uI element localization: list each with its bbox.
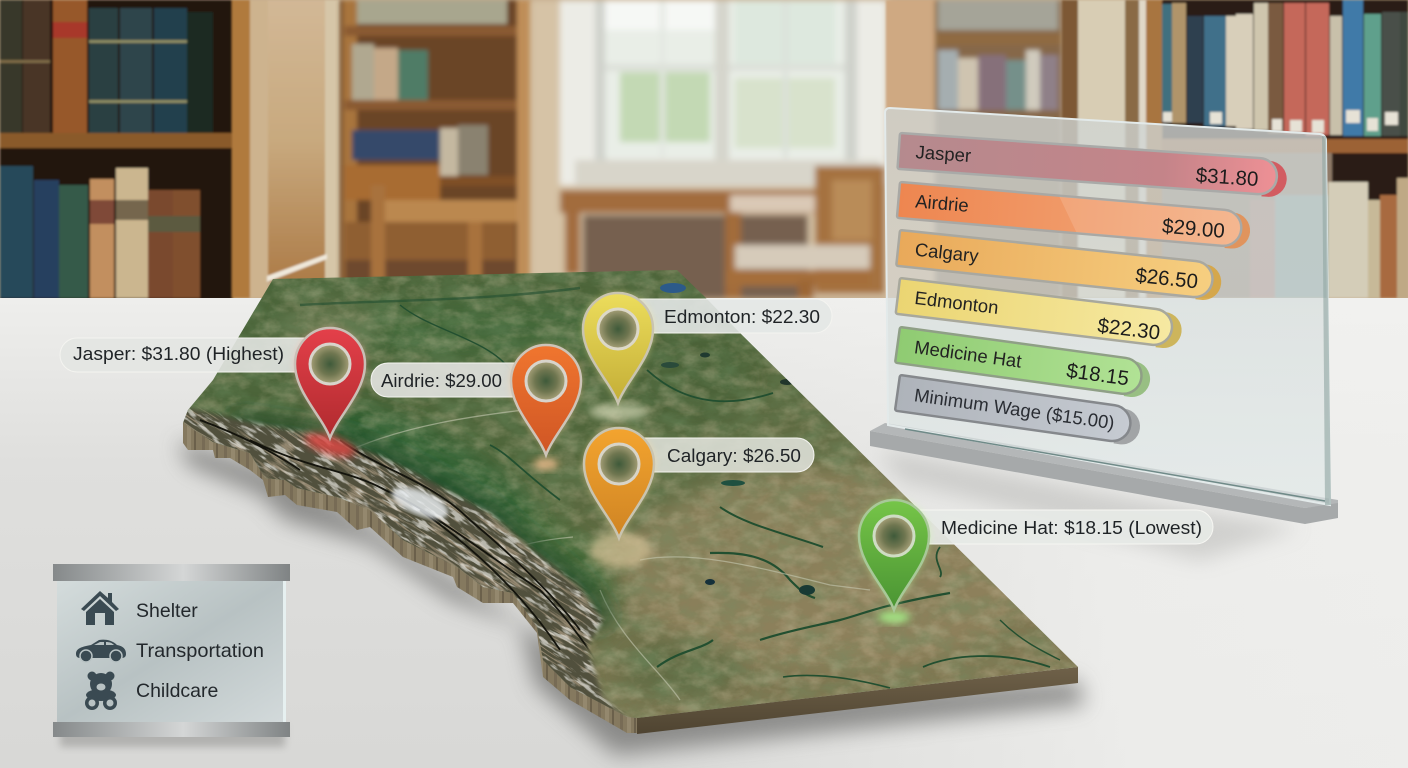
icon: house — [81, 591, 119, 625]
legend plaque — [53, 564, 290, 747]
legend text: Shelter: Shelter — [136, 600, 198, 622]
label: Medicine Hat: Medicine Hat: $18.15 (Lowest) — [941, 518, 1202, 538]
pin: Edmonton — [583, 293, 653, 403]
mountain band — [183, 406, 628, 717]
glass panel chart — [870, 108, 1338, 560]
pin: Medicine Hat — [859, 500, 929, 610]
right bookcases — [886, 0, 1408, 298]
window and desk — [531, 0, 891, 298]
map shadow on table — [178, 440, 1085, 755]
bar: Airdrie: Airdrie — [915, 190, 970, 216]
icon: car — [76, 640, 126, 662]
legend text: Childcare: Childcare — [136, 680, 218, 702]
label: Jasper: Jasper: $31.80 (Highest) — [73, 344, 284, 364]
map surface — [183, 270, 1078, 718]
pin: Jasper — [295, 328, 365, 438]
bar: Calgary: Calgary — [914, 239, 980, 266]
bar: Medicine Hat: $18.15 — [1065, 359, 1130, 390]
centre bookcase — [340, 0, 531, 298]
rivers and lakes — [300, 288, 1060, 688]
foothills shading — [230, 425, 605, 625]
bar: Edmonton: $22.30 — [1096, 314, 1161, 345]
bar: Jasper: $31.80 — [1195, 164, 1259, 191]
bar: Jasper — [897, 133, 1288, 198]
left bookcase — [0, 0, 340, 300]
label: Calgary — [635, 438, 814, 472]
bar: Airdrie: $29.00 — [1161, 215, 1226, 243]
bar: Calgary — [896, 230, 1223, 302]
bar: Minimum Wage: Minimum Wage ($15.00) — [913, 384, 1116, 433]
bar: Edmonton: Edmonton — [914, 287, 1000, 318]
table surface — [0, 298, 1408, 768]
pin: Calgary — [584, 428, 654, 538]
legend text: Transportation: Transportation — [136, 640, 264, 662]
label: Edmonton — [635, 299, 832, 333]
label: Edmonton: Edmonton: $22.30 — [664, 307, 820, 327]
bar: Edmonton — [895, 278, 1184, 350]
icon: teddy bear — [85, 672, 117, 710]
bar: Jasper: Jasper — [915, 141, 972, 166]
bar: Calgary: $26.50 — [1134, 264, 1199, 293]
background: library bookshelves — [0, 0, 1408, 300]
label: Calgary: Calgary: $26.50 — [667, 446, 801, 466]
steel base — [870, 423, 1338, 508]
bar: Minimum Wage — [895, 375, 1143, 447]
label: Medicine Hat — [910, 510, 1213, 544]
bar: Medicine Hat — [895, 327, 1153, 399]
map side wall — [183, 423, 637, 733]
city glows — [590, 532, 650, 568]
panel shadow — [880, 450, 1300, 560]
bar: Medicine Hat: Medicine Hat — [913, 336, 1023, 372]
bar: Airdrie — [897, 182, 1252, 250]
glass pane — [885, 108, 1330, 505]
map: 3D terrain slab of Alberta — [183, 270, 1078, 734]
pin: Airdrie — [511, 345, 581, 455]
label: Airdrie: Airdrie: $29.00 — [381, 371, 502, 391]
label: Jasper — [60, 338, 310, 372]
label: Airdrie — [371, 363, 525, 397]
